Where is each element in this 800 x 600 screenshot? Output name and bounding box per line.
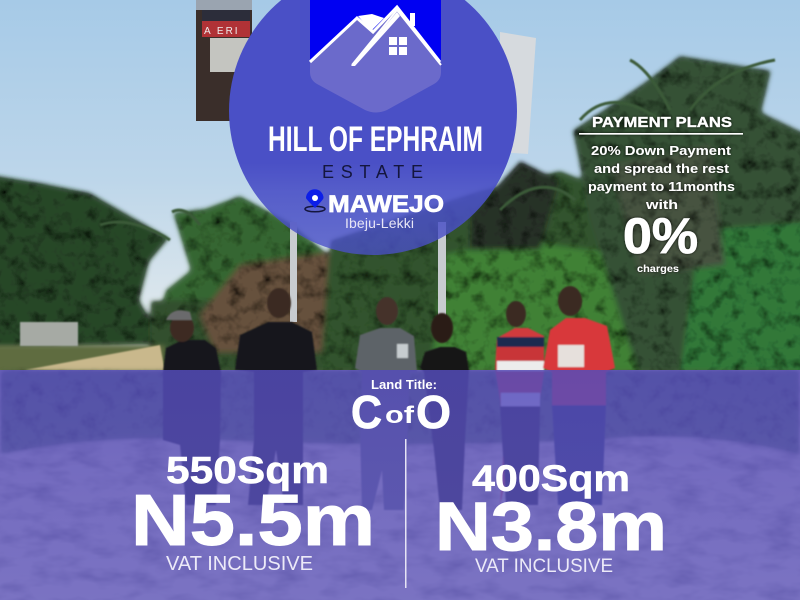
palm fronds [100, 60, 775, 240]
left billboard: A ERI [204, 26, 240, 37]
ground, lower field [0, 370, 800, 600]
text: location: MAWEJO [328, 191, 444, 218]
heading: C of O: of [385, 402, 415, 429]
panel: logo disc [229, 0, 517, 255]
text: area: Ibeju-Lekki [345, 215, 414, 231]
price block: 400 sqm [435, 458, 667, 577]
price block: 400 sqm: 400Sqm [472, 458, 630, 499]
price block: 550 sqm: VAT INCLUSIVE [166, 553, 313, 575]
right billboard [500, 32, 536, 154]
left billboard [196, 0, 252, 121]
heading: C of O [351, 386, 451, 438]
price block: 400 sqm: VAT INCLUSIVE [475, 556, 613, 577]
panel: land title and prices [131, 378, 667, 588]
icon: location pin [305, 189, 325, 212]
text: zero percent: 0% [623, 208, 698, 264]
text: plan details: payment to 11months [588, 179, 735, 194]
panel: purple overlay lower band [0, 370, 800, 600]
heading: estate name: HILL OF EPHRAIM [268, 120, 483, 159]
ground and wall, left [0, 345, 165, 375]
icon: hexagon house logo [310, 0, 441, 112]
six people [163, 286, 615, 510]
price block: 550 sqm: N5.5m [131, 481, 375, 561]
price block: 550 sqm [131, 450, 375, 575]
heading: C of O: C [351, 386, 382, 438]
text: estate: ESTATE [322, 162, 423, 182]
text: plan details [588, 143, 735, 212]
text: plan details: 20% Down Payment [591, 143, 732, 158]
text: plan details: and spread the rest [594, 161, 730, 176]
price block: 400 sqm: N3.8m [435, 488, 667, 565]
heading: C of O: O [416, 386, 451, 438]
heading: payment plans: PAYMENT PLANS [592, 114, 732, 131]
panel: payment plans [579, 114, 743, 275]
price block: 550 sqm: 550Sqm [166, 450, 329, 492]
text: plan details: with [645, 197, 678, 212]
text: charges: charges [637, 263, 679, 275]
support poles [290, 222, 297, 322]
text: land title label: Land Title: [371, 378, 437, 392]
foliage masses [0, 55, 800, 380]
